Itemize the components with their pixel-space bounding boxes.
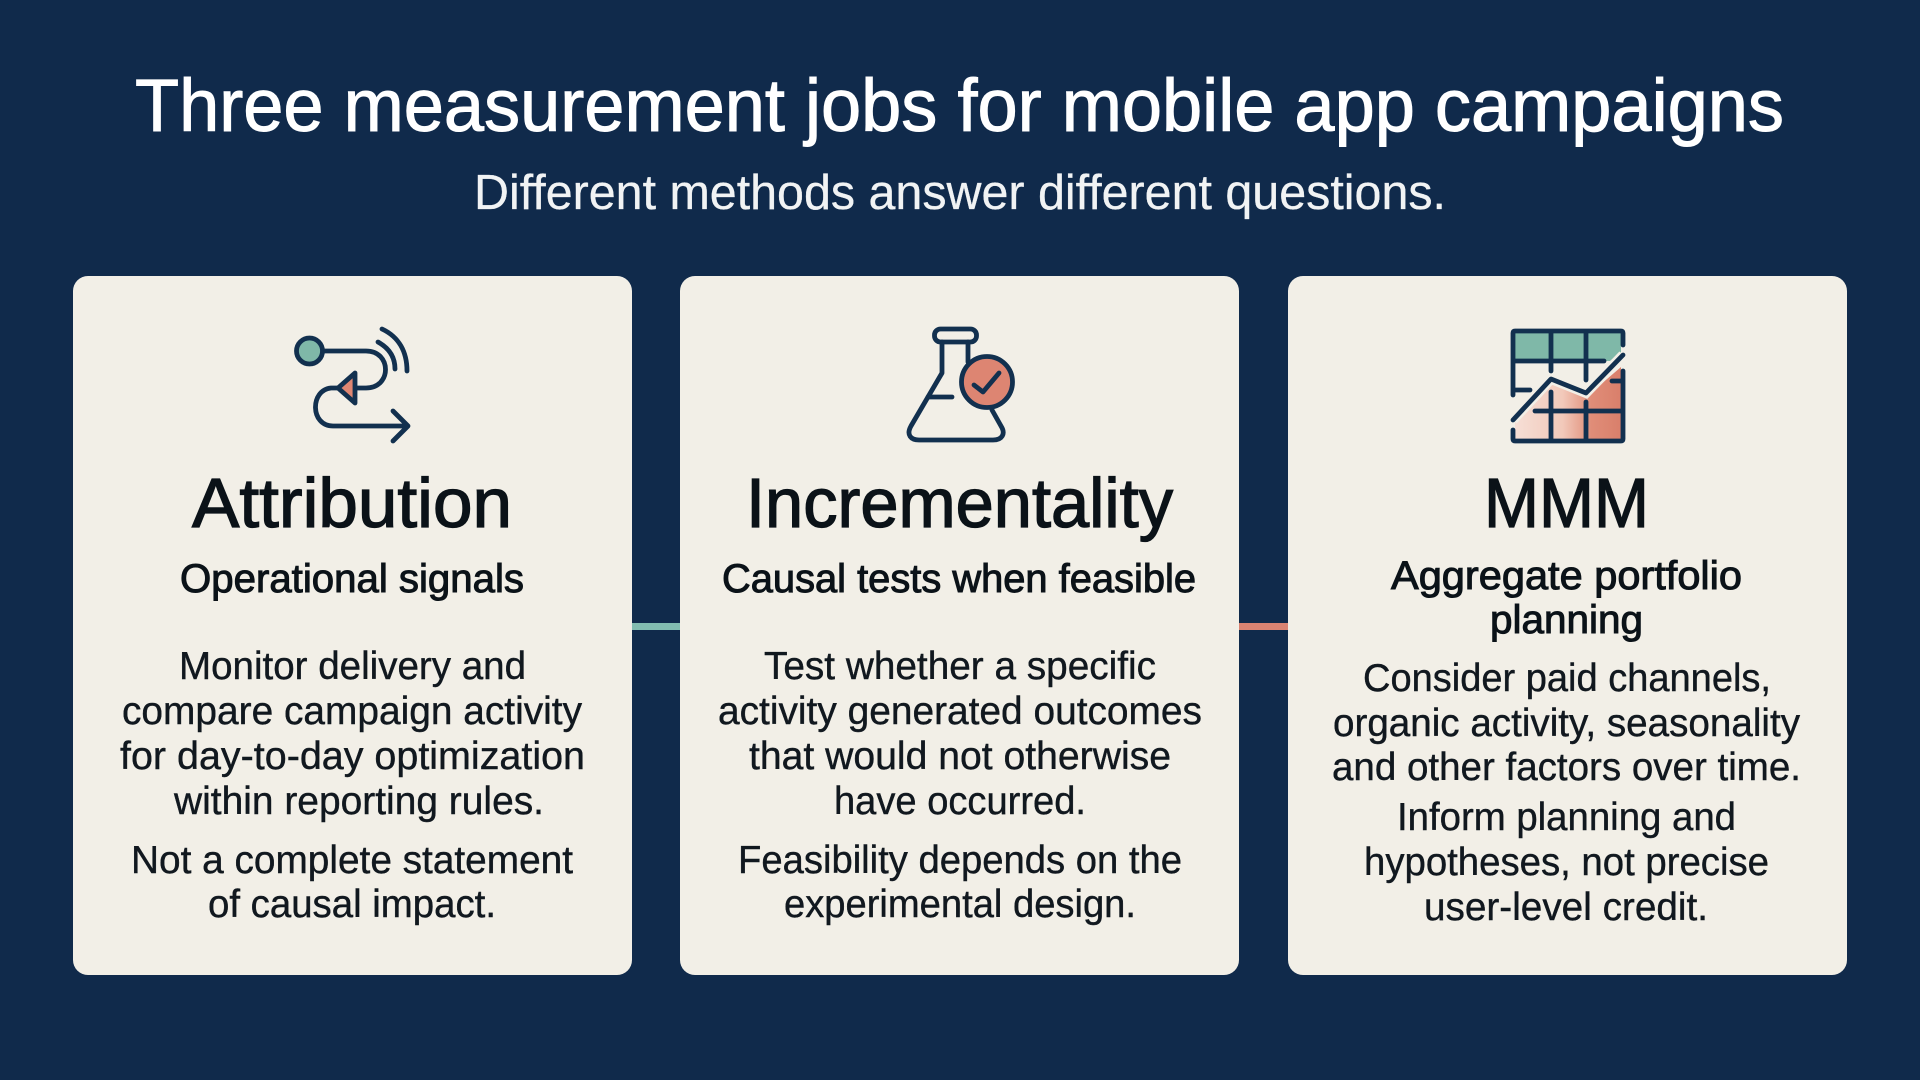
card background bbox=[73, 276, 632, 975]
title: Three measurement jobs for mobile app campaigns bbox=[135, 64, 1784, 147]
panel: attribution bbox=[73, 276, 632, 975]
icon: attribution path bbox=[296, 329, 408, 441]
body text: what it does: within reporting rules. bbox=[173, 780, 544, 823]
body text: limitation bbox=[738, 839, 1182, 926]
body text: limitation: Not a complete statement bbox=[131, 839, 573, 882]
body text: limitation: experimental design. bbox=[784, 883, 1136, 926]
body text: what it does: Consider paid channels, bbox=[1363, 657, 1771, 700]
body text: what it does bbox=[120, 645, 585, 823]
icon: grid with trend line bbox=[1513, 331, 1623, 441]
body text: what it does: activity generated outcomes bbox=[718, 690, 1202, 733]
body text: limitation: Feasibility depends on the bbox=[738, 839, 1182, 882]
connector: attribution to incrementality bbox=[632, 623, 680, 630]
body text: what it does bbox=[1332, 657, 1801, 789]
body text: limitation bbox=[1364, 796, 1769, 929]
body text: what it does: and other factors over time. bbox=[1332, 746, 1801, 789]
body text: what it does: for day-to-day optimization bbox=[120, 735, 585, 778]
panel: MMM bbox=[1288, 276, 1847, 975]
subtitle: Different methods answer different questions. bbox=[474, 166, 1446, 220]
subheading: planning bbox=[1490, 598, 1643, 642]
subheading: Causal tests when feasible bbox=[722, 557, 1196, 601]
card background bbox=[680, 276, 1239, 975]
body text: limitation bbox=[131, 839, 573, 926]
body text: limitation: Inform planning and bbox=[1397, 796, 1736, 839]
subheading: Operational signals bbox=[180, 557, 524, 601]
heading: Attribution bbox=[192, 464, 512, 542]
heading: MMM bbox=[1484, 464, 1649, 542]
connector: incrementality to MMM bbox=[1239, 623, 1288, 630]
panel: incrementality bbox=[680, 276, 1239, 975]
card background bbox=[1288, 276, 1847, 975]
body text: what it does: organic activity, seasonality bbox=[1333, 702, 1800, 745]
heading: Incrementality bbox=[746, 464, 1173, 542]
body text: limitation: of causal impact. bbox=[208, 883, 496, 926]
body text: limitation: user-level credit. bbox=[1424, 886, 1708, 929]
body text: what it does bbox=[718, 645, 1202, 823]
icon: flask with check bbox=[909, 329, 1012, 440]
body text: limitation: hypotheses, not precise bbox=[1364, 841, 1769, 884]
body text: what it does: Test whether a specific bbox=[764, 645, 1156, 688]
title block bbox=[135, 64, 1784, 220]
subheading bbox=[1391, 554, 1742, 642]
body text: what it does: Monitor delivery and bbox=[179, 645, 526, 688]
subheading: Aggregate portfolio bbox=[1391, 554, 1742, 598]
body text: what it does: compare campaign activity bbox=[122, 690, 582, 733]
body text: what it does: that would not otherwise bbox=[749, 735, 1171, 778]
body text: what it does: have occurred. bbox=[834, 780, 1086, 823]
